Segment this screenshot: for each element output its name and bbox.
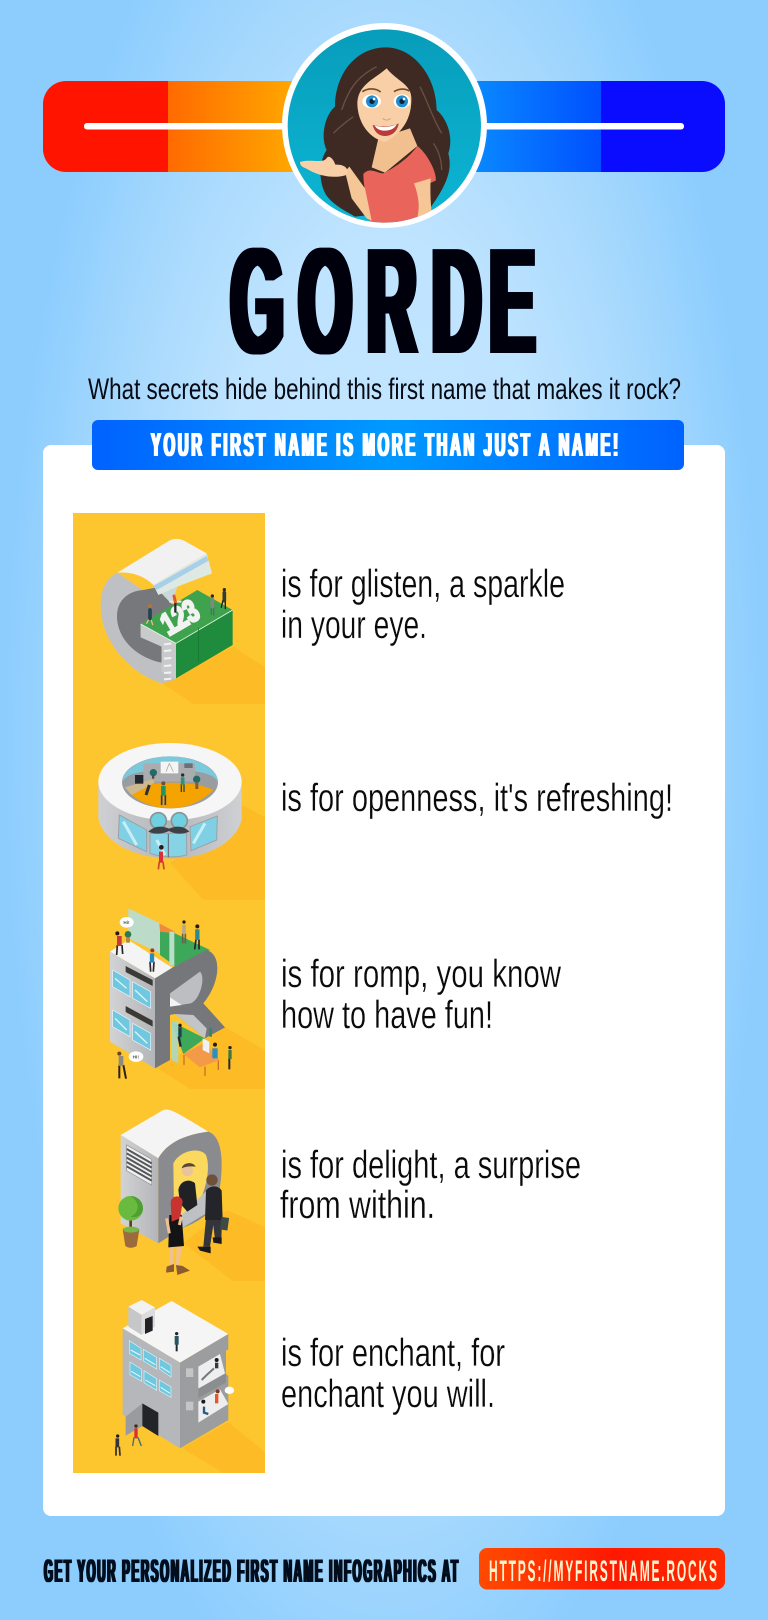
neck: [372, 128, 417, 173]
plant: [127, 1217, 135, 1231]
panel: yellow illustration strip: [73, 513, 265, 1473]
icon: letter E building: [116, 1300, 234, 1456]
man with briefcase: [203, 1218, 222, 1247]
text block: E: enchant you will.: [281, 1373, 495, 1416]
icon: letter R building: Hi!: [123, 920, 130, 925]
text block: E: [281, 1332, 505, 1416]
eyes: [362, 94, 381, 108]
face: [357, 68, 411, 142]
text block: E: is for enchant, for: [281, 1332, 505, 1375]
vent: [127, 1145, 152, 1185]
person in front of O: [158, 862, 164, 869]
mouth: [373, 123, 399, 136]
text block: R: [281, 953, 562, 1037]
R front: [155, 950, 225, 1068]
glasses and moustache: [150, 813, 166, 829]
icon: letter R building: [110, 908, 232, 1079]
text block: D: is for delight, a surprise: [281, 1144, 581, 1187]
man inside doorway: [178, 1181, 197, 1212]
footer url button: HTTPS://MYFIRSTNAME.ROCKS: [489, 1553, 717, 1588]
hair: [320, 47, 450, 217]
balconies: [198, 1354, 225, 1389]
text block: D: from within.: [280, 1184, 435, 1227]
text block: G: is for glisten, a sparkle: [281, 563, 565, 606]
text block: D: [280, 1144, 581, 1227]
icon: letter O building: [98, 743, 242, 869]
avatar: woman in circle: [282, 23, 487, 228]
header ribbon: [43, 81, 725, 172]
people on E: [174, 1344, 180, 1351]
ring top: [98, 743, 242, 820]
text block: G: in your eye.: [281, 604, 427, 647]
title: GORDE: [231, 216, 535, 385]
text block: R: is for romp, you know: [281, 953, 562, 996]
icon: letter D building: [118, 1110, 229, 1275]
panel: white content card: [43, 445, 725, 1516]
text block: R: how to have fun!: [281, 994, 493, 1037]
board and objects: [161, 762, 178, 773]
arm and hand: [345, 167, 372, 221]
people and bubbles on R: [117, 945, 123, 955]
icon: letter R building: Hi!: [133, 1054, 139, 1059]
banner heading: YOUR FIRST NAME IS MORE THAN JUST A NAME!: [151, 428, 618, 464]
shirt: [363, 146, 436, 225]
woman: [169, 1247, 182, 1265]
people on G: [147, 588, 226, 625]
banner heading: [92, 420, 684, 470]
table: [183, 1043, 219, 1067]
text block: G: [281, 563, 565, 647]
floor: [128, 783, 213, 808]
numbers sign 123: 123: [154, 592, 205, 642]
footer call to action text: GET YOUR PERSONALIZED FIRST NAME INFOGRAPHICS AT: [44, 1554, 458, 1590]
people in O: [162, 795, 165, 805]
windows: [118, 815, 147, 852]
icon: letter G building: [101, 539, 233, 683]
windows: [129, 1341, 171, 1397]
windows: [113, 970, 151, 1050]
roof box: [128, 1300, 155, 1315]
